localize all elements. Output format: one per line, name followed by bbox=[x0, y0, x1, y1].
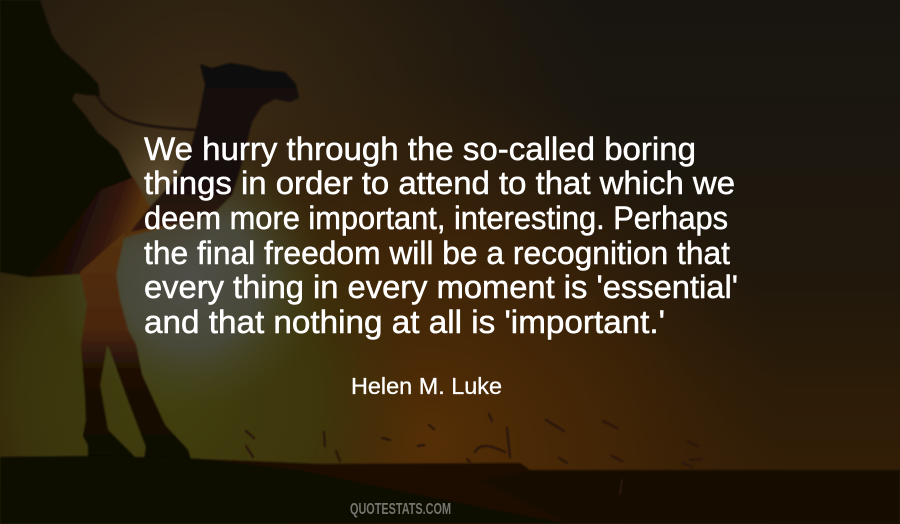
quote text: and that nothing at all is 'important.' bbox=[144, 304, 665, 340]
quote text: the final freedom will be a recognition that bbox=[144, 235, 730, 271]
quote text bbox=[144, 131, 738, 340]
camel body bbox=[0, 150, 175, 277]
lead rope bbox=[97, 96, 198, 130]
author: Helen M. Luke bbox=[351, 373, 502, 399]
quote text: things in order to attend to that which we bbox=[144, 165, 735, 201]
rider bbox=[0, 0, 132, 277]
flock of birds bbox=[246, 414, 702, 494]
watermark: QUOTESTATS.COM bbox=[350, 501, 451, 518]
ground bbox=[0, 456, 900, 524]
camel and rider silhouette bbox=[0, 0, 299, 460]
camel neck and head bbox=[130, 63, 299, 232]
quote text: We hurry through the so-called boring bbox=[144, 131, 696, 167]
camel front legs bbox=[80, 232, 191, 460]
quote text: deem more important, interesting. Perhaps bbox=[144, 200, 728, 236]
quote text: every thing in every moment is 'essential' bbox=[144, 269, 738, 305]
